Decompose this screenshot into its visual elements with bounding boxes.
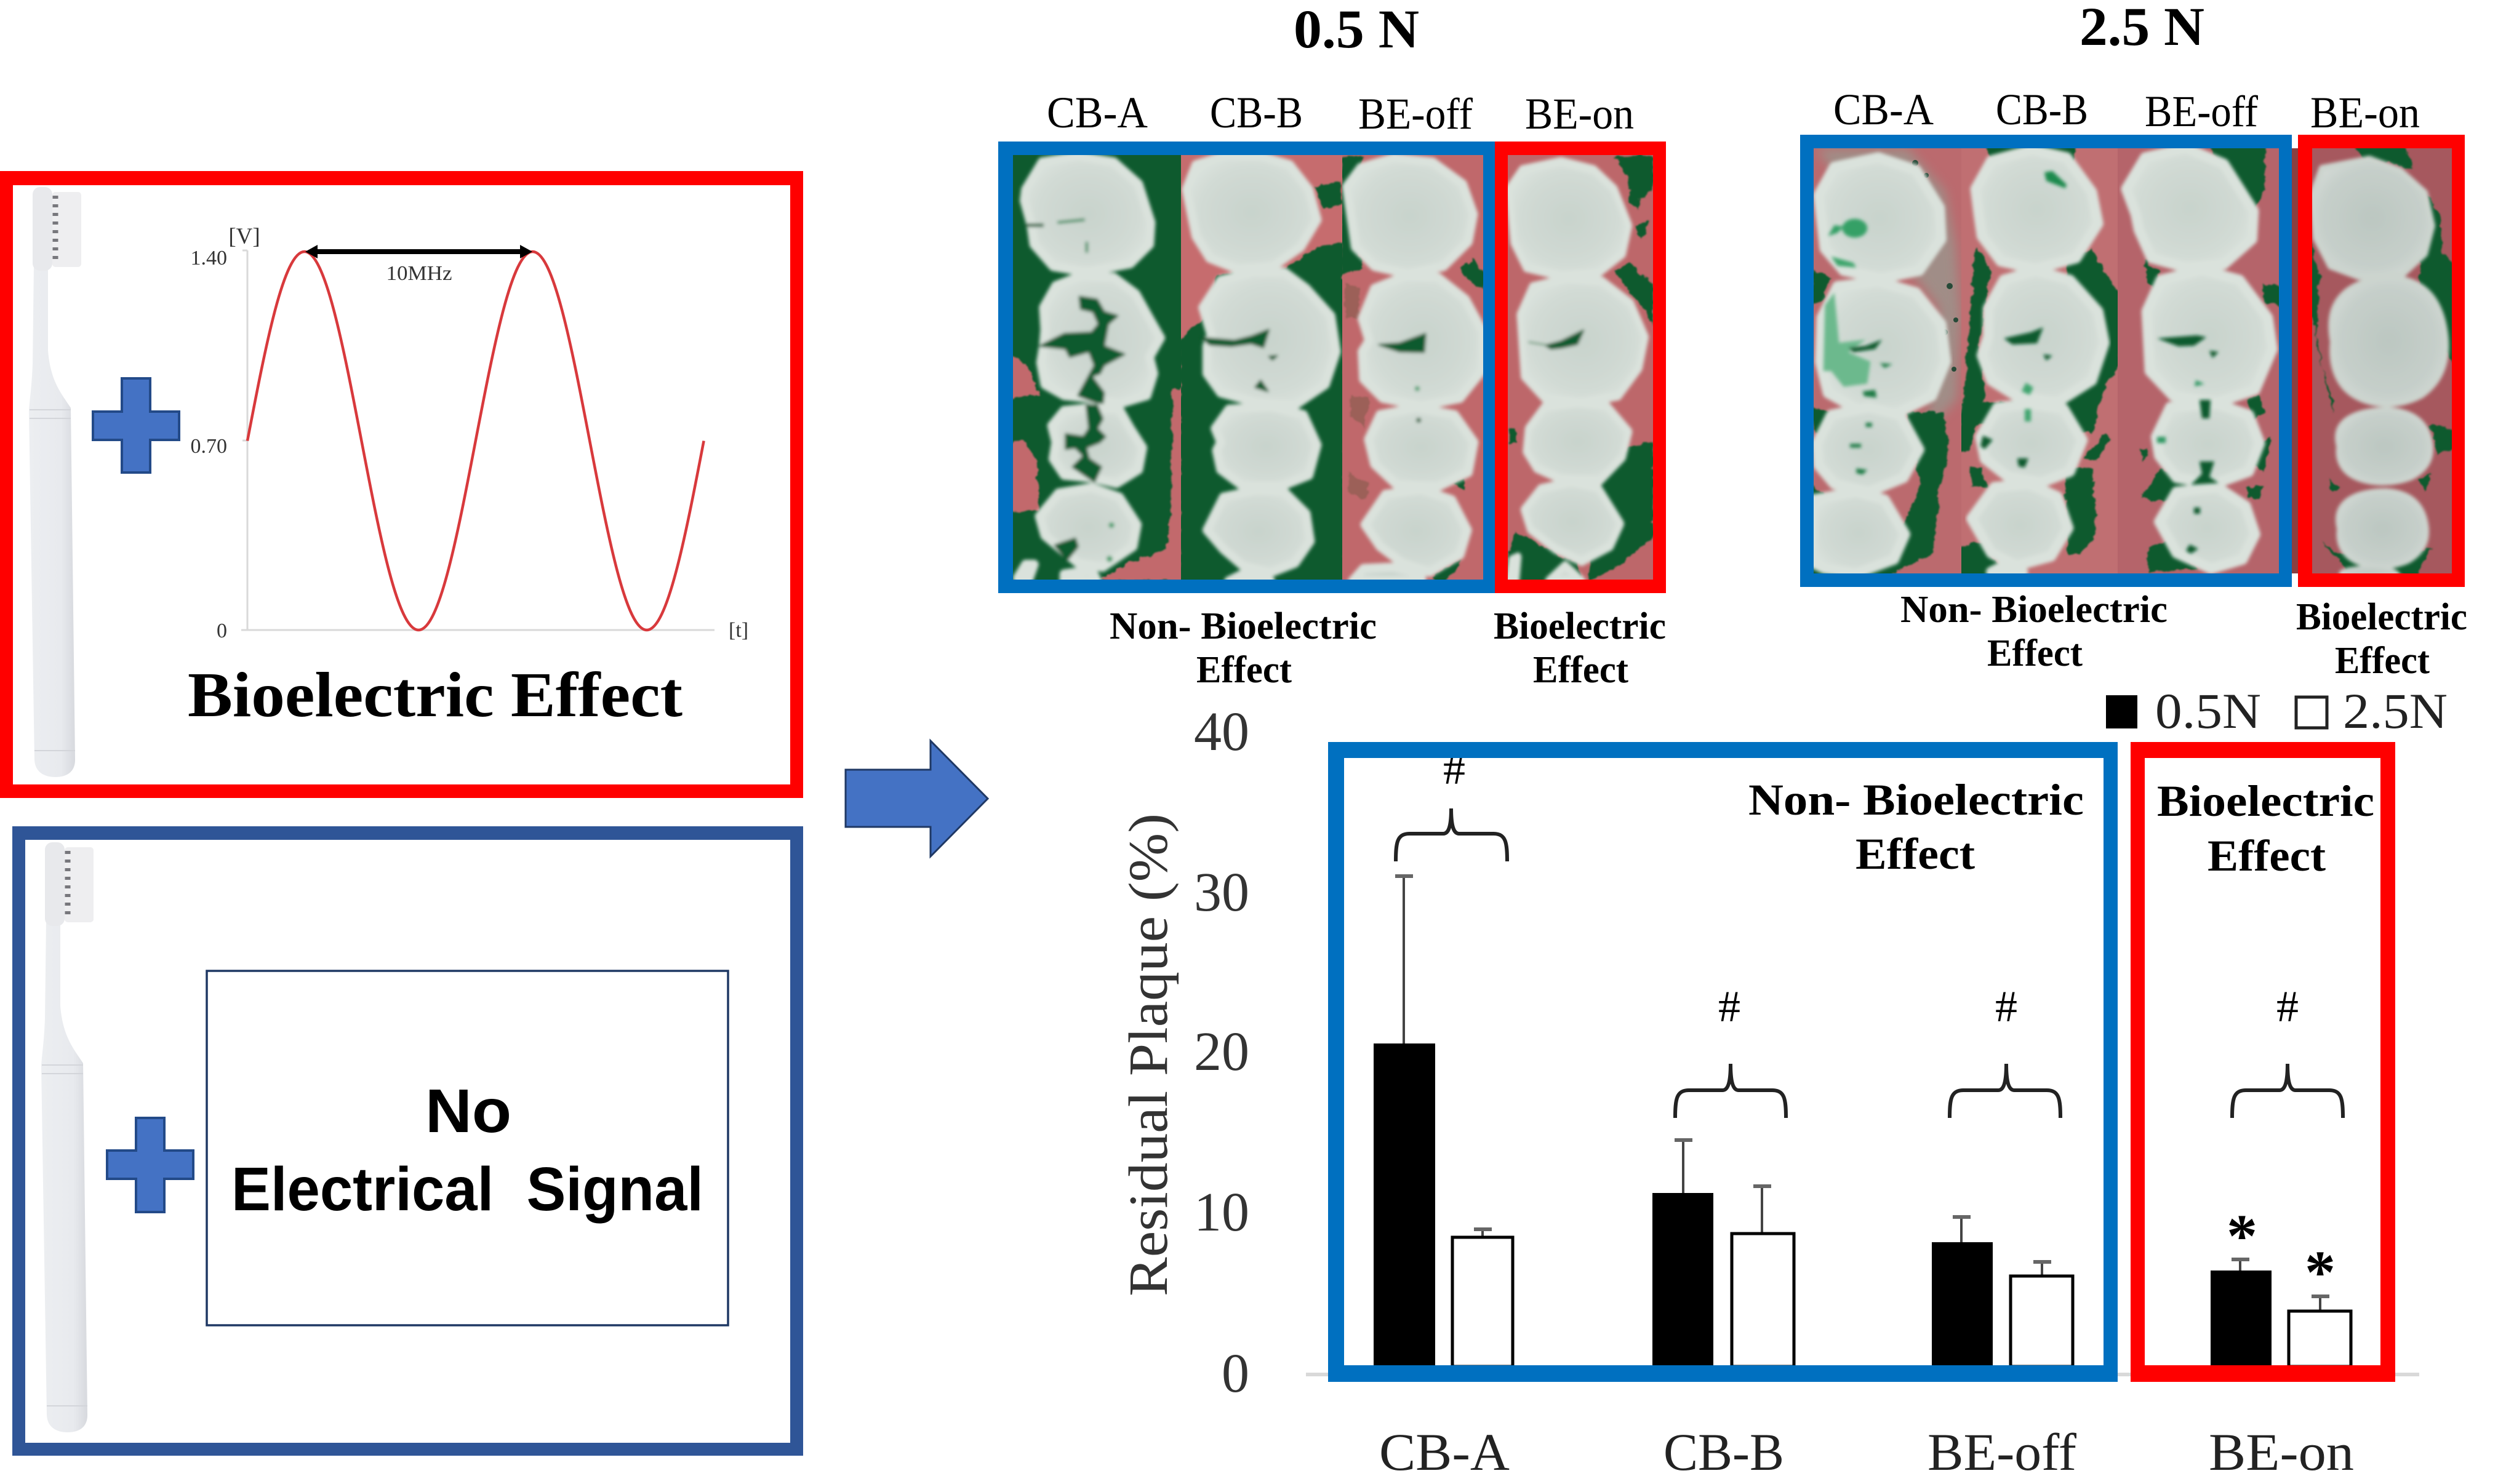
column labels: CB-A [1047,88,1148,137]
caption: bioelectric effect: Effect [2335,640,2430,682]
tooth 4 [1039,487,1137,567]
tooth 2 [1203,272,1336,405]
icon: plus sign [107,1118,193,1212]
tooth 1 [1187,156,1317,269]
photo: CB-B 0.5 N [1181,155,1342,580]
column labels: BE-on [2310,88,2420,137]
icon: plus sign [93,378,179,473]
caption: non-bioelectric effect: Effect [1196,649,1292,691]
sine curve [247,252,704,630]
caption: non-bioelectric effect: Non- Bioelectric [1110,605,1377,647]
tooth 1 [1509,162,1629,276]
photo: CB-B 2.5 N [1961,148,2118,573]
tooth 2 [1520,279,1645,402]
bars: BE-on [2211,1259,2351,1366]
tooth 3 [1526,402,1629,481]
axis labels: 0.70 [191,435,227,458]
axis labels: 0 [217,620,227,642]
bars: BE-off [1932,1217,2073,1366]
tooth 1 [1819,158,1941,279]
significance marks: # [1718,982,1740,1031]
tooth 3 [2156,404,2260,484]
caption: non-bioelectric effect: Effect [1987,632,2083,674]
arrow: to results [846,741,988,856]
x axis labels: BE-on [2209,1422,2354,1482]
axis labels [191,224,748,642]
tooth 1 [1347,158,1473,274]
tooth 3 [1215,407,1317,486]
tooth 4 [1207,490,1310,573]
label: non-bioelectric effect: Non- Bioelectric [1748,775,2084,824]
column labels: BE-on [1525,89,1634,138]
tooth 4 [1972,484,2068,565]
legend [2106,683,2448,739]
photo: CB-A 0.5 N [1013,155,1181,580]
column labels: CB-B [1210,88,1303,137]
icon: toothbrush [41,842,94,1432]
caption: non-bioelectric effect [1110,605,1377,691]
axis labels: 1.40 [191,247,227,269]
legend: 0.5N [2155,683,2261,739]
y axis title: Residual Plaque (%) [1118,813,1179,1296]
tooth 1 [2312,159,2432,277]
y axis ticks: 30 [1194,862,1249,923]
asterisks: * [2305,1238,2336,1306]
panel: no electrical signal [12,826,803,1456]
caption: bioelectric effect: Effect [1533,649,1628,691]
heading: 0.5 N: 0.5 N [1294,0,1419,60]
text: No: No [425,1077,511,1146]
tooth 2 [1041,276,1161,404]
label: non-bioelectric effect: Effect [1855,829,1975,879]
asterisks: * [2227,1202,2257,1270]
frame: bioelectric [2298,135,2465,587]
tooth 3 [1052,408,1143,484]
y axis ticks: 0 [1222,1343,1249,1404]
column labels [1833,85,2420,137]
period arrow [305,245,532,258]
x axis labels [1379,1422,2354,1482]
tooth 1 [1976,150,2098,269]
x axis labels: CB-A [1379,1422,1510,1482]
bars: CB-A [1374,876,1513,1366]
axis labels: 10MHz [386,262,452,285]
tooth 4 [1524,482,1620,561]
y axis ticks: 40 [1194,701,1249,762]
label: bioelectric effect: Effect [2208,831,2326,880]
photo: BE-on 2.5 N [2312,148,2452,573]
tooth 4 [1812,492,1905,573]
tooth 4 [1365,490,1467,572]
significance braces [1396,808,2343,1118]
bars: CB-B [1652,1140,1794,1366]
frame: bioelectric [1495,142,1666,593]
frame: non-bioelectric [1328,742,2118,1382]
column labels [1047,88,1634,138]
photo: BE-on 0.5 N [1508,155,1653,580]
chart: sine wave signal [191,224,748,642]
tooth 3 [1369,408,1474,487]
panel frame: blue [12,826,803,1456]
icon: toothbrush [29,187,81,777]
frame: non-bioelectric [1800,135,2292,587]
panel: 0.5 N tooth photos [998,0,1666,691]
column labels: BE-off [1358,89,1473,138]
axis labels: [V] [228,224,260,249]
frame: non-bioelectric [998,142,1495,593]
column labels: CB-B [1996,85,2088,134]
label: bioelectric effect [2157,776,2374,880]
significance marks [1443,744,2299,1031]
x axis labels: CB-B [1663,1422,1784,1482]
label: bioelectric effect: Bioelectric [2157,776,2374,826]
significance marks: # [2276,982,2299,1031]
tooth 1 [2126,148,2254,268]
caption: bioelectric effect [2296,596,2467,682]
asterisks [2227,1202,2336,1306]
column labels: BE-off [2145,87,2258,136]
heading: Bioelectric Effect: Bioelectric Effect [188,660,683,730]
divider strip between frames [2292,148,2299,573]
text: Electrical Signal: Electrical Signal [231,1155,703,1224]
significance marks: # [1443,744,1465,794]
panel: bioelectric effect [0,171,803,798]
photo: BE-off 0.5 N [1342,155,1483,580]
tooth 2 [2147,270,2272,402]
x axis labels: BE-off [1928,1422,2076,1482]
label: non-bioelectric effect [1748,775,2084,879]
panel frame: red [0,171,803,798]
caption: non-bioelectric effect [1900,589,2168,674]
caption: bioelectric effect: Bioelectric [1494,605,1666,647]
tooth 3 [1817,407,1919,492]
y axis ticks [1194,701,1249,1404]
y axis ticks: 20 [1194,1021,1249,1082]
caption: bioelectric effect: Bioelectric [2296,596,2467,638]
tooth 1 [1025,156,1151,272]
y axis ticks: 10 [1194,1182,1249,1243]
significance marks: # [1995,982,2017,1031]
panel: 2.5 N tooth photos [1800,0,2467,682]
tooth 4 [2160,487,2255,568]
inner signal box [207,971,728,1325]
tooth 3 [1980,404,2083,482]
frame: bioelectric [2131,742,2395,1382]
column labels: CB-A [1833,85,1934,134]
caption: bioelectric effect [1494,605,1666,691]
caption: non-bioelectric effect: Non- Bioelectric [1900,589,2168,631]
panel: residual plaque bar chart [1118,683,2448,1482]
photo: BE-off 2.5 N [2118,148,2279,573]
tooth 2 [1363,276,1483,406]
tooth 2 [1820,282,1946,413]
axis labels: [t] [729,619,748,642]
legend: 2.5N [2343,683,2448,739]
tooth 2 [1982,271,2104,402]
photo: CB-A 2.5 N [1814,148,1961,573]
